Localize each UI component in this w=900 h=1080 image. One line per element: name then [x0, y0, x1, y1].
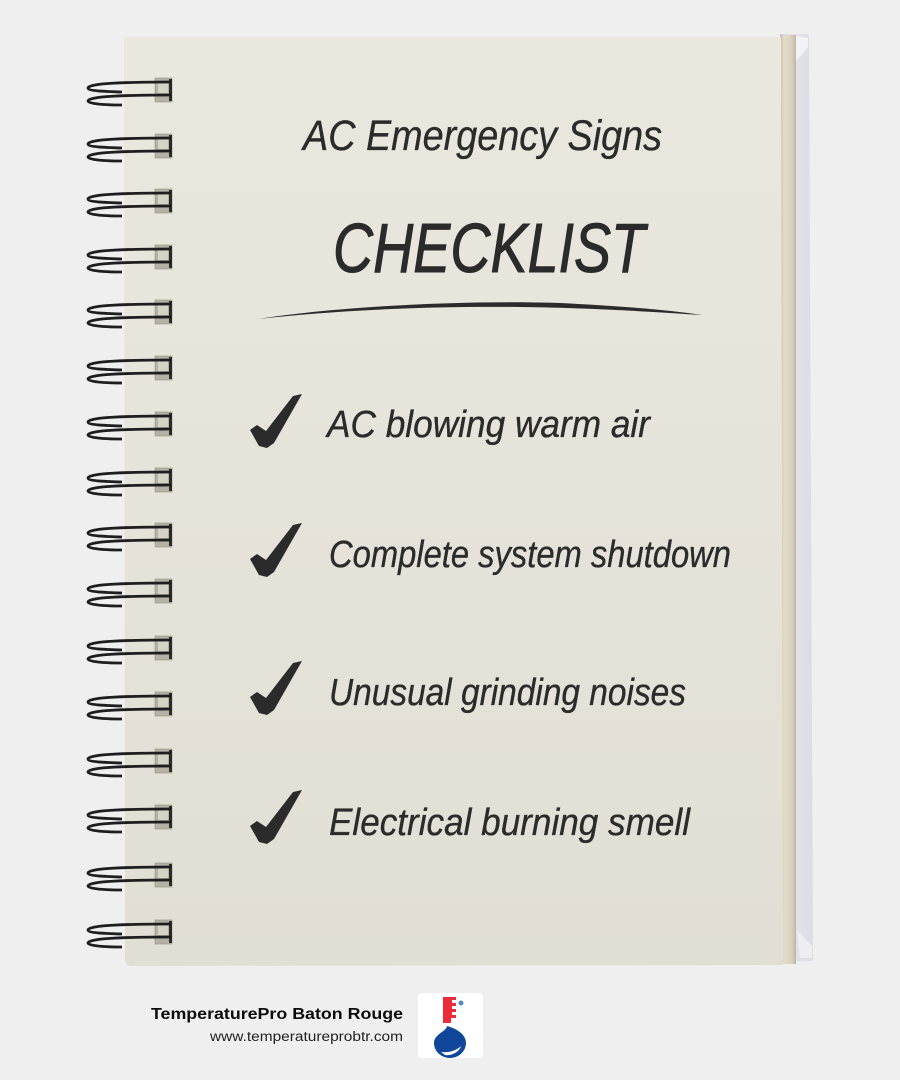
icon: check mark — [250, 523, 302, 577]
page stack edge — [781, 35, 796, 964]
logo — [418, 993, 483, 1058]
checklist item 3 — [250, 661, 686, 715]
title: AC Emergency Signs: AC Emergency Signs — [300, 112, 662, 160]
item text: Unusual grinding noises: Unusual grinding noises — [329, 672, 686, 714]
checklist item 1 — [250, 394, 651, 448]
footer brand name: TemperaturePro Baton Rouge — [151, 1006, 403, 1023]
footer website: www.temperatureprobtr.com — [209, 1029, 403, 1044]
checklist item 4 — [250, 790, 691, 844]
heading: CHECKLIST: CHECKLIST — [333, 209, 648, 287]
icon: check mark — [250, 394, 302, 448]
notebook back cover — [780, 34, 813, 962]
icon: check mark — [250, 790, 302, 844]
logo blue drop — [434, 1026, 466, 1058]
icon: check mark — [250, 661, 302, 715]
logo thermometer — [443, 997, 456, 1023]
item text: Complete system shutdown: Complete system shutdown — [329, 534, 731, 576]
notebook page — [124, 37, 783, 966]
item text: AC blowing warm air: AC blowing warm air — [325, 404, 651, 446]
checklist item 2 — [250, 523, 731, 577]
item text: Electrical burning smell: Electrical burning smell — [329, 802, 691, 844]
heading underline swoosh — [258, 302, 702, 319]
spiral binding — [88, 78, 172, 947]
